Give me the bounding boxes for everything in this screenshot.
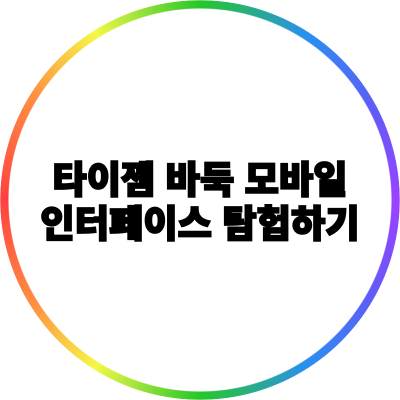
title line 2: 인터페이스 탐험하기 [40,203,360,245]
title [40,159,360,245]
title line 1: 타이젬 바둑 모바일 [52,159,348,201]
